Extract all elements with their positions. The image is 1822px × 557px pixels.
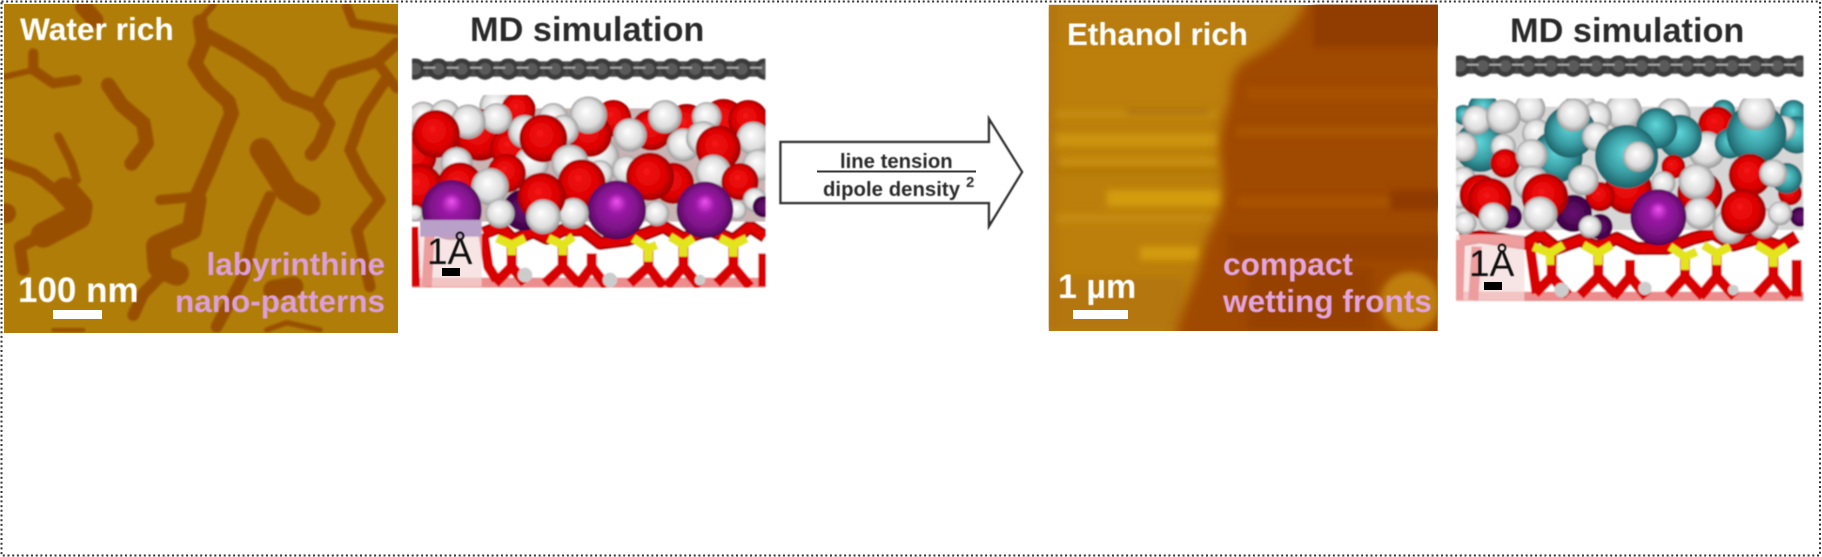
- label: 1 µm: 1 µm: [1058, 268, 1136, 306]
- text: exponent 2: 2: [966, 174, 974, 191]
- scale box: [420, 220, 482, 287]
- panel: water MD simulation: [397, 68, 774, 287]
- scale bar: 1 µm: [1073, 310, 1128, 319]
- label: 100 nm: 100 nm: [18, 271, 139, 310]
- graphene sheet: [1456, 65, 1803, 66]
- arrow: line tension over dipole density squared: [780, 119, 1022, 226]
- scale bar: 100 nm: [53, 310, 102, 319]
- heading: MD simulation right: MD simulation: [1510, 12, 1744, 50]
- silica surface: [412, 220, 765, 287]
- scale box: [1456, 234, 1524, 301]
- panel: ethanol MD simulation: [1448, 65, 1815, 301]
- caption: labyrinthine nano-patterns: labyrinthine: [206, 246, 385, 282]
- panel: ethanol rich AFM image: [1048, 4, 1438, 331]
- text: line tension: line tension: [840, 151, 953, 173]
- heading: ethanol rich: Ethanol rich: [1067, 17, 1248, 52]
- caption: labyrinthine nano-patterns: nano-patterns: [175, 283, 385, 319]
- caption: compact wetting fronts: compact: [1223, 246, 1353, 282]
- silica surface: [1456, 230, 1803, 301]
- graphene sheet: [412, 68, 765, 69]
- scale bar: 1 angstrom right: [1484, 282, 1502, 290]
- molecules: ethanol, water and ions: [1448, 93, 1815, 301]
- molecules: water and ions: [397, 89, 774, 287]
- scale bar: 1 angstrom left: [442, 268, 460, 276]
- caption: compact wetting fronts: wetting fronts: [1222, 283, 1432, 319]
- text: dipole density: dipole density: [823, 179, 961, 201]
- label: 1 angstrom right: 1Å: [1469, 243, 1515, 284]
- heading: MD simulation left: MD simulation: [470, 11, 704, 49]
- heading: water rich: Water rich: [20, 11, 174, 47]
- label: 1 angstrom left: 1Å: [427, 231, 473, 272]
- panel: water rich AFM image: [4, 4, 398, 333]
